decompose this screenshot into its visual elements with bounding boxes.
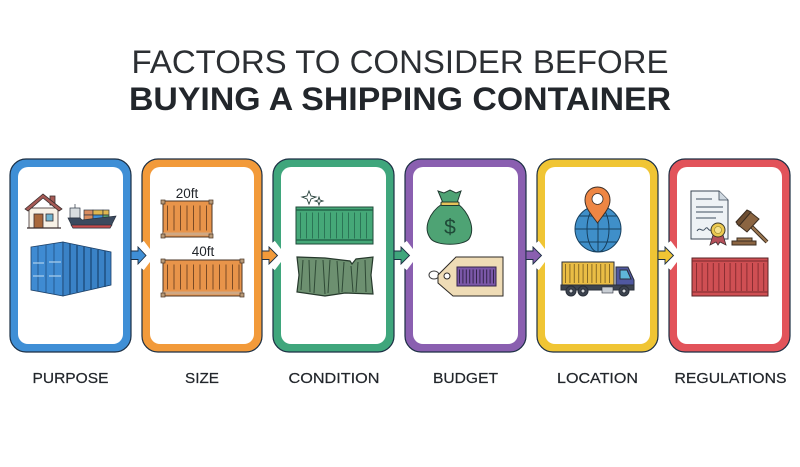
title: BUYING A SHIPPING CONTAINER [129, 81, 671, 117]
title: FACTORS TO CONSIDER BEFORE [132, 44, 668, 80]
icon: damaged green container [297, 257, 373, 296]
panel labels: CONDITION [288, 371, 380, 387]
icon: certificate document [691, 191, 728, 245]
panel: purpose [10, 159, 131, 352]
icon: price tag [429, 257, 503, 296]
arrow: location to regulations [658, 243, 678, 268]
panel labels: LOCATION [557, 371, 638, 387]
20ft label: 20ft [176, 186, 199, 201]
icon: globe [575, 206, 621, 252]
title [129, 44, 671, 117]
panel: budget [405, 159, 526, 352]
panel labels: BUDGET [433, 371, 498, 387]
icon: 40ft container [161, 259, 244, 297]
icon: new green container [296, 207, 373, 244]
40ft label: 40ft [192, 244, 215, 259]
arrow: size to condition [262, 243, 282, 268]
icon: map pin [585, 187, 610, 223]
icon: money bag [427, 190, 472, 244]
icon: truck [561, 262, 634, 296]
icon: 20ft container [161, 200, 213, 238]
arrow: purpose to size [131, 243, 150, 268]
panel labels: SIZE [185, 371, 219, 387]
icon: money bag: $ [444, 216, 456, 239]
panel: size [142, 159, 262, 352]
icon: cargo ship [68, 204, 116, 228]
icon: sparkles [302, 191, 323, 205]
icon: house [25, 194, 62, 228]
arrow: condition to budget [394, 243, 414, 268]
panel: condition [273, 159, 394, 352]
icon: blue container [31, 242, 111, 296]
icon: gavel [732, 210, 767, 245]
icon: red container [692, 258, 768, 296]
panel labels: REGULATIONS [674, 371, 786, 387]
panel labels: PURPOSE [32, 371, 109, 387]
panel: location [537, 159, 658, 352]
panel labels [32, 371, 786, 387]
arrow: budget to location [526, 243, 546, 268]
panel: regulations [669, 159, 790, 352]
